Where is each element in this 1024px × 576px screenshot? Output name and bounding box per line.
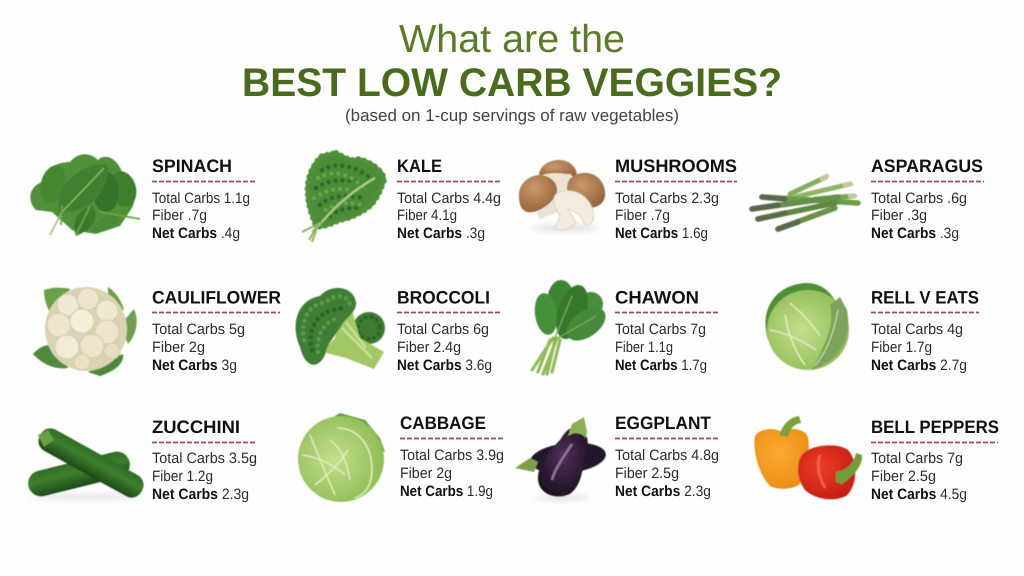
heading: EGGPLANT: EGGPLANT: [615, 413, 711, 433]
nutrition: broccoli: [397, 321, 492, 374]
nutrition: bell peppers: Net Carbs 4.5g: [871, 486, 967, 503]
panel: eggplant: [515, 413, 719, 500]
panel: zucchini: [25, 417, 257, 503]
nutrition: mushrooms: Total Carbs 2.3g: [615, 190, 719, 207]
heading: RELL V EATS: RELL V EATS: [871, 288, 979, 308]
nutrition: eggplant: Net Carbs 2.3g: [615, 483, 711, 500]
nutrition: cauliflower: Total Carbs 5g: [152, 321, 245, 338]
nutrition: cabbage: Net Carbs 1.9g: [400, 483, 493, 500]
nutrition: mushrooms: Net Carbs 1.6g: [615, 225, 708, 242]
heading: CABBAGE: CABBAGE: [400, 413, 486, 433]
nutrition: asparagus: Fiber .3g: [871, 207, 927, 224]
nutrition: rell v eats: [871, 321, 967, 374]
nutrition: asparagus: Total Carbs .6g: [871, 190, 967, 207]
heading: BELL PEPPERS: BELL PEPPERS: [871, 417, 999, 437]
nutrition: broccoli: Fiber 2.4g: [397, 339, 461, 356]
heading: ZUCCHINI: ZUCCHINI: [152, 417, 240, 437]
nutrition: asparagus: [871, 190, 967, 242]
heading: CHAWON: CHAWON: [615, 288, 699, 308]
icon: bell peppers: [754, 416, 862, 499]
nutrition: kale: Total Carbs 4.4g: [397, 190, 501, 207]
heading: BROCCOLI: BROCCOLI: [397, 288, 490, 308]
panel: cauliflower: [33, 287, 281, 376]
icon: broccoli: [296, 288, 385, 369]
nutrition: spinach: Net Carbs .4g: [152, 225, 240, 242]
nutrition: broccoli: Net Carbs 3.6g: [397, 357, 492, 374]
icon: eggplant: [515, 417, 607, 500]
nutrition: broccoli: Total Carbs 6g: [397, 321, 489, 338]
nutrition: rell v eats: Net Carbs 2.7g: [871, 357, 967, 374]
title: [242, 18, 782, 125]
heading: KALE: KALE: [397, 156, 442, 176]
nutrition: rell v eats: Fiber 1.7g: [871, 339, 932, 356]
nutrition: kale: Net Carbs .3g: [397, 225, 485, 242]
nutrition: zucchini: Total Carbs 3.5g: [152, 450, 257, 467]
nutrition: zucchini: [152, 450, 257, 503]
nutrition: mushrooms: Fiber .7g: [615, 207, 670, 224]
nutrition: asparagus: Net Carbs .3g: [871, 225, 959, 242]
panel: bell peppers: [754, 416, 999, 503]
nutrition: cabbage: Total Carbs 3.9g: [400, 447, 504, 464]
nutrition: kale: Fiber 4.1g: [397, 207, 457, 224]
nutrition: zucchini: Net Carbs 2.3g: [152, 486, 249, 503]
nutrition: chawon: Fiber 1.1g: [615, 339, 673, 356]
heading: MUSHROOMS: MUSHROOMS: [615, 156, 737, 176]
icon: kale: [302, 153, 384, 242]
icon: mushrooms: [519, 160, 605, 231]
nutrition: cauliflower: [152, 321, 245, 374]
heading: ASPARAGUS: ASPARAGUS: [871, 156, 983, 176]
nutrition: chawon: Total Carbs 7g: [615, 321, 706, 338]
nutrition: bell peppers: Fiber 2.5g: [871, 468, 936, 485]
nutrition: zucchini: Fiber 1.2g: [152, 468, 213, 485]
nutrition: chawon: Net Carbs 1.7g: [615, 357, 707, 374]
heading: SPINACH: SPINACH: [152, 156, 232, 176]
nutrition: cauliflower: Net Carbs 3g: [152, 357, 237, 374]
panel: broccoli: [296, 288, 501, 374]
nutrition: cabbage: Fiber 2g: [400, 465, 452, 482]
nutrition: cauliflower: Fiber 2g: [152, 339, 205, 356]
nutrition: rell v eats: Total Carbs 4g: [871, 321, 963, 338]
panel: mushrooms: [519, 156, 737, 242]
nutrition: kale: [397, 190, 501, 242]
subtitle: (based on 1-cup servings of raw vegetables): [345, 106, 679, 125]
nutrition: bell peppers: [871, 450, 967, 503]
nutrition: spinach: [152, 190, 250, 242]
title line 1: What are the: [399, 18, 625, 61]
panel: spinach: [30, 154, 257, 242]
icon: chawon: [532, 280, 611, 374]
icon: cauliflower: [33, 287, 137, 376]
title line 2: BEST LOW CARB VEGGIES?: [242, 61, 782, 105]
panel: asparagus: [752, 156, 984, 242]
nutrition: spinach: Total Carbs 1.1g: [152, 190, 250, 207]
icon: spinach: [30, 154, 140, 236]
panel: rell v eats: [766, 283, 979, 374]
panel: chawon: [532, 280, 719, 374]
nutrition: eggplant: [615, 447, 719, 500]
panel: cabbage: [298, 413, 504, 502]
icon: cabbage: [298, 413, 385, 502]
nutrition: spinach: Fiber .7g: [152, 207, 207, 224]
icon: cabbage head: [766, 283, 849, 370]
nutrition: eggplant: Total Carbs 4.8g: [615, 447, 719, 464]
heading: CAULIFLOWER: CAULIFLOWER: [152, 288, 281, 308]
nutrition: mushrooms: [615, 190, 719, 242]
panel: kale: [302, 153, 501, 242]
icon: zucchini: [25, 424, 148, 502]
nutrition: chawon: [615, 321, 707, 374]
nutrition: bell peppers: Total Carbs 7g: [871, 450, 963, 467]
icon: asparagus: [752, 176, 858, 229]
nutrition: cabbage: [400, 447, 504, 500]
nutrition: eggplant: Fiber 2.5g: [615, 465, 679, 482]
